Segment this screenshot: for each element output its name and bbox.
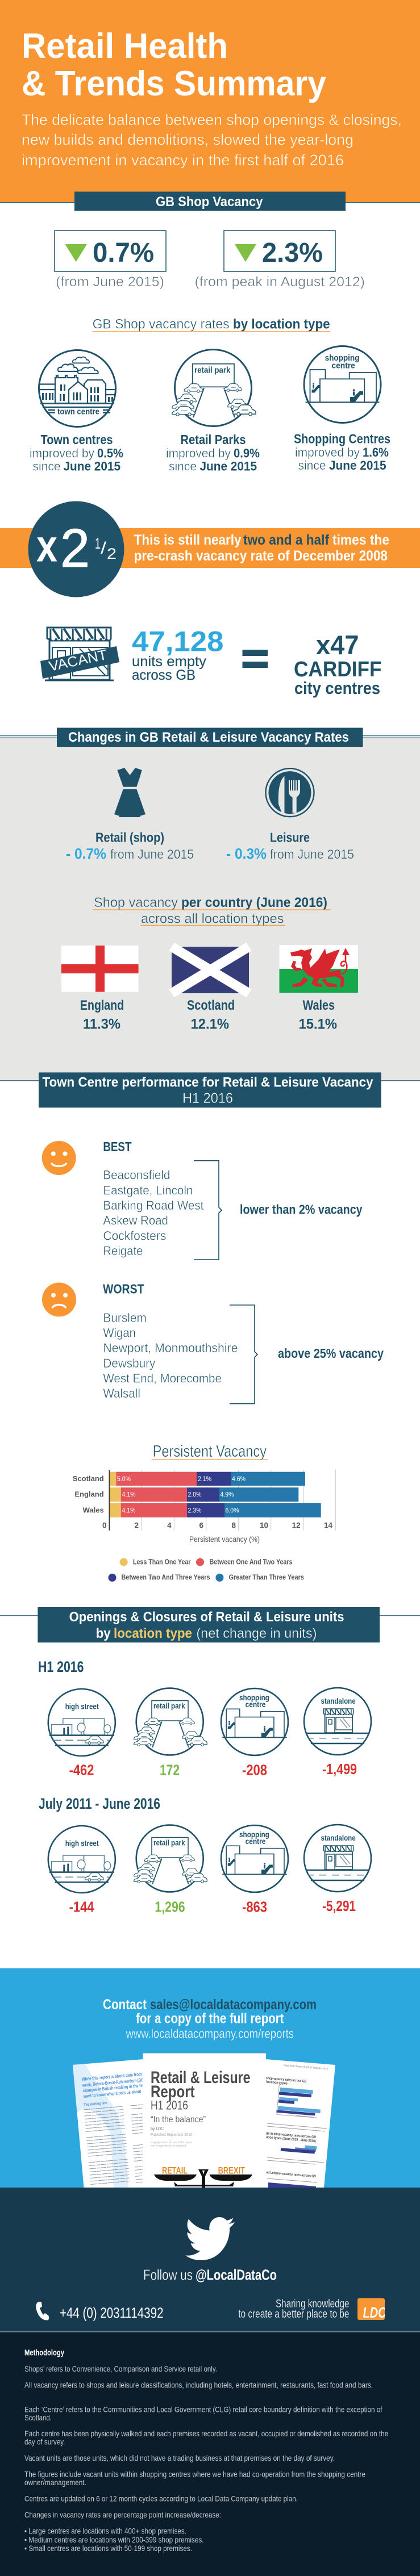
heading: shop vacancy per country — [93, 895, 331, 927]
bar: Scotland: Scotland — [73, 1474, 104, 1483]
axis labels: 14 — [324, 1521, 332, 1530]
label: town centres: June 2015 — [64, 459, 120, 474]
panel: orange header — [0, 0, 420, 202]
stat: 2.3% from peak: (from peak in August 2012) — [194, 274, 365, 290]
bar chart: persistent vacancy: Persistent vacancy (%) — [189, 1534, 260, 1544]
icon: standalone — [304, 1688, 371, 1755]
methodology text: Centres are updated on 6 or 12 month cycles according to Local Data Company update plan. — [24, 2494, 298, 2503]
bar: Wales — [83, 1503, 321, 1517]
list: best centres: Cockfosters — [103, 1229, 166, 1243]
label: town centres: 0.5% — [97, 446, 123, 460]
panel: best town centres — [42, 1139, 363, 1260]
report page: right: location types — [266, 2080, 288, 2086]
report page: cover: Retail & Leisure — [151, 2068, 251, 2087]
heading: persistent vacancy: Persistent Vacancy — [153, 1442, 267, 1461]
icon: high street: high street — [65, 1701, 99, 1711]
list: worst centres: Dewsbury — [103, 1356, 155, 1370]
heading: vacancy rates by location type: by location type — [233, 317, 330, 332]
icon: shopping centre: shopping — [325, 354, 359, 363]
net change figures: 172 — [160, 1762, 180, 1779]
label: England 11.3%: England — [80, 998, 124, 1013]
badge: x2 1/2: x — [36, 520, 57, 571]
axis labels: 0 — [102, 1521, 107, 1530]
follow us: Follow us — [143, 2266, 193, 2283]
methodology text: Vacant units are those units, which did not have a trading business at that premises on the day of survey. — [24, 2453, 335, 2462]
bar: Scotland: 2.1% — [198, 1475, 211, 1483]
bar: Wales: Wales — [83, 1506, 104, 1514]
logo: LDC — [357, 2298, 385, 2320]
list: worst centres — [103, 1311, 238, 1400]
label: Wales 15.1%: 15.1% — [299, 1017, 337, 1032]
bar: England — [74, 1487, 298, 1502]
panel: changes in retail and leisure vacancy rates — [0, 728, 420, 1081]
panel: H1 2016 openings and closures — [38, 1658, 371, 1779]
report page: right: nd Leisure vacancy rates across GB — [266, 2171, 316, 2178]
label: leisure: Leisure — [270, 830, 310, 844]
stat: 47,128 units empty: units empty — [132, 654, 207, 670]
icon: standalone: standalone — [321, 1833, 356, 1842]
report page: cover: Report — [151, 2082, 195, 2101]
panel: best town centres: BEST — [103, 1139, 131, 1154]
bar: Scotland — [73, 1472, 305, 1486]
panel: social footer — [0, 2188, 420, 2332]
label: town centres: Town centres — [41, 432, 113, 447]
report page: right: shop vacancy rates across GB — [266, 2076, 306, 2084]
report page: left — [73, 2059, 144, 2188]
net change figures: -1,499 — [322, 1760, 357, 1778]
callout: two and a half times — [0, 501, 420, 597]
icon: standalone: standalone — [321, 1696, 356, 1705]
contact text: sales@localdatacompany.com — [150, 1997, 317, 2013]
title — [22, 27, 326, 103]
report page: right: ge in shop vacancy rates across GB — [266, 2131, 316, 2139]
report page: cover: by LDC — [151, 2126, 164, 2131]
report page: left: While this report is about data from t — [81, 2071, 144, 2082]
bracket — [194, 1161, 222, 1260]
bar: Scotland: 5.0% — [117, 1475, 131, 1483]
report page: left: week, Before-Brexit-Referendum (BE — [82, 2077, 144, 2088]
report page: left: The starting line — [84, 2101, 107, 2107]
icon: shopping centre — [221, 1688, 288, 1755]
icon: retail park: retail park — [194, 366, 231, 375]
bar: Wales: 6.0% — [225, 1506, 239, 1514]
label: town centres: since — [33, 459, 60, 474]
heading: openings and closures: by — [96, 1626, 111, 1641]
bar: England: 4.9% — [221, 1490, 234, 1498]
stat: 2.3% from peak — [194, 231, 365, 290]
stat: 47,128 units empty — [132, 626, 224, 683]
icon: equals sign — [242, 650, 268, 668]
icon: sad face — [42, 1282, 76, 1316]
heading: vacancy rates by location type — [93, 317, 330, 332]
callout text: times the — [332, 532, 389, 548]
label: retail parks: improved by — [166, 446, 231, 460]
badge: x2 1/2: 2 — [107, 545, 117, 562]
icon: high street: high street — [65, 1838, 99, 1847]
panel: July 2011 - June 2016 openings and closures: July 2011 - June 2016 — [39, 1795, 160, 1812]
list: worst centres: Wigan — [103, 1326, 136, 1340]
heading: openings and closures — [38, 1607, 380, 1642]
badge: x2 1/2: 2 — [60, 518, 90, 579]
legend: Greater Than Three Years — [228, 1573, 304, 1582]
contact text — [103, 1997, 317, 2041]
methodology text: Scotland. — [24, 2413, 52, 2422]
flag: Scotland — [172, 947, 249, 993]
icon: town centre: town centre — [57, 407, 99, 416]
heading: openings and closures: (net change in units) — [196, 1626, 317, 1641]
net change figures — [69, 1760, 357, 1779]
icon: down triangle — [65, 244, 87, 262]
legend: Between Two And Three Years — [122, 1573, 210, 1582]
panel: worst town centres — [42, 1282, 384, 1404]
list: worst centres: Newport, Monmouthshire — [103, 1341, 238, 1355]
stat: 0.7% from June 2015: (from June 2015) — [56, 274, 164, 290]
icon: knife and fork — [266, 768, 314, 817]
icon: high street — [48, 1689, 115, 1756]
bar: Scotland: 4.6% — [232, 1475, 246, 1483]
methodology text: • Large centres are locations with 400+ shop premises. — [24, 2526, 186, 2535]
methodology text: • Small centres are locations with 50-199 shop premises. — [24, 2544, 192, 2553]
heading: shop vacancy per country: per country (June 2016) — [181, 895, 327, 910]
callout text: two and a half — [243, 532, 330, 548]
icon: down triangle — [235, 244, 256, 262]
label: shopping centres: improved by — [295, 445, 360, 459]
heading: town centre performance: Town Centre performance for Retail & Leisure Vacancy — [42, 1075, 373, 1090]
report page: left: want to know what it tells us about — [83, 2089, 142, 2099]
label: shopping centres: Shopping Centres — [294, 432, 390, 446]
heading: GB Shop Vacancy — [74, 192, 346, 211]
legend — [108, 1557, 304, 1582]
label: town centres: improved by — [30, 446, 94, 460]
badge: x2 1/2: / — [101, 539, 107, 558]
list: best centres: Barking Road West — [103, 1198, 203, 1212]
net change figures: 1,296 — [155, 1898, 185, 1916]
label: Scotland 12.1%: 12.1% — [191, 1017, 229, 1032]
list: best centres: Reigate — [103, 1244, 143, 1258]
label: leisure — [226, 830, 354, 862]
axis labels: 12 — [292, 1521, 301, 1530]
axis labels: 2 — [134, 1521, 139, 1530]
contact text: Contact — [103, 1997, 147, 2013]
panel: H1 2016 openings and closures: H1 2016 — [38, 1658, 84, 1675]
panel: worst town centres: WORST — [103, 1282, 144, 1297]
stat: 47,128 units empty: across GB — [132, 667, 196, 683]
report page: left: changes in British retailing in the fir — [82, 2083, 143, 2093]
icon: retail brexit scales — [154, 2165, 252, 2188]
legend: Between One And Two Years — [209, 1557, 292, 1566]
strapline: Sharing knowledge — [276, 2298, 349, 2310]
badge: x2 1/2: 1 — [95, 535, 101, 552]
bar: Wales: 2.3% — [188, 1506, 202, 1514]
label: retail parks: June 2015 — [200, 459, 257, 474]
bracket — [230, 1305, 257, 1404]
heading: shop vacancy per country: Shop vacancy — [94, 895, 178, 910]
net change figures: -208 — [242, 1762, 267, 1779]
list: best centres: Askew Road — [103, 1214, 168, 1228]
axis labels: 6 — [199, 1521, 203, 1530]
title: & Trends Summary — [22, 64, 326, 103]
net change figures: -462 — [69, 1762, 94, 1779]
icon: shopping centre: shopping — [239, 1830, 269, 1839]
icon: retail brexit scales: RETAIL — [162, 2165, 188, 2176]
axis labels: 10 — [260, 1521, 268, 1530]
label: retail — [66, 830, 194, 862]
heading: town centre performance — [39, 1072, 381, 1107]
axis labels: 4 — [167, 1521, 172, 1530]
methodology text: Shops’ refers to Convenience, Comparison and Service retail only. — [24, 2364, 217, 2373]
list: best centres: Eastgate, Lincoln — [103, 1184, 193, 1197]
methodology text — [24, 2364, 388, 2553]
panel: methodology — [0, 2332, 420, 2576]
net change figures: -863 — [242, 1898, 267, 1916]
follow us — [143, 2266, 277, 2283]
label: retail parks: Retail Parks — [181, 432, 246, 447]
panel: shopping centres — [294, 346, 390, 472]
heading: shop vacancy per country: across all location types — [141, 911, 284, 927]
panel: July 2011 - June 2016 openings and closures — [39, 1795, 371, 1916]
report page: right: ation types (June 2015 - June 2016) — [266, 2135, 316, 2143]
list: worst centres: Walsall — [103, 1386, 140, 1400]
label: retail parks — [166, 432, 260, 474]
icon: shopping centre: shopping — [239, 1693, 269, 1702]
icon: town centre — [39, 350, 116, 427]
label: retail: Retail (shop) — [95, 830, 164, 844]
flag: Wales — [280, 945, 358, 993]
heading: GB Shop Vacancy: GB Shop Vacancy — [156, 194, 263, 210]
list: worst centres: Burslem — [103, 1311, 147, 1325]
label: town centres — [30, 432, 123, 474]
icon: shopping centre: centre — [246, 1700, 266, 1709]
strapline: to create a better place to be — [238, 2308, 349, 2320]
stat: x47 Cardiff city centres: x47 — [316, 630, 359, 660]
panel: methodology: Methodology — [24, 2349, 64, 2358]
label: Wales 15.1% — [299, 998, 337, 1032]
label: leisure: from June 2015 — [270, 847, 354, 862]
axis labels — [102, 1521, 332, 1530]
report page: cover — [143, 2054, 266, 2188]
stat: 2.3% from peak: 2.3% — [262, 238, 323, 268]
methodology text: owner/management. — [24, 2478, 86, 2487]
axis labels: 8 — [231, 1521, 236, 1530]
label: retail parks: 0.9% — [234, 446, 260, 460]
report page: cover: Published September 2016 — [151, 2133, 192, 2137]
stat: x47 Cardiff city centres: city centres — [294, 678, 380, 698]
flag: England — [61, 946, 139, 992]
net change figures — [69, 1897, 356, 1916]
icon: standalone — [304, 1825, 371, 1892]
stat: 0.7% from June 2015 — [55, 231, 166, 290]
heading: openings and closures: Openings & Closures of Retail & Leisure units — [69, 1609, 344, 1625]
label: retail: - 0.7% — [66, 845, 106, 862]
label: England 11.3%: 11.3% — [83, 1017, 120, 1032]
panel: social footer: +44 (0) 2031114392 — [60, 2304, 164, 2321]
label: shopping centres: 1.6% — [363, 445, 389, 459]
icon: retail park — [172, 350, 256, 426]
icon: retail park: retail park — [153, 1701, 185, 1710]
stat: x47 Cardiff city centres — [294, 630, 382, 698]
label: leisure: - 0.3% — [226, 845, 267, 862]
subtitle: new builds and demolitions, slowed the year-long — [22, 131, 354, 148]
panel: retail parks — [166, 350, 260, 474]
label: shopping centres — [294, 432, 390, 472]
subtitle: improvement in vacancy in the first half of 2016 — [22, 152, 344, 169]
icon: phone — [36, 2302, 49, 2320]
methodology text: The figures include vacant units within shopping centres where we have had co-operation from the shopping centre — [24, 2470, 365, 2479]
label: England 11.3% — [80, 998, 124, 1032]
strapline — [238, 2298, 349, 2320]
label: retail: from June 2015 — [110, 847, 194, 862]
subtitle — [22, 111, 402, 169]
icon: shopping centre — [304, 346, 381, 423]
icon: shopping centre — [221, 1825, 288, 1892]
icon: shopping centre: centre — [332, 361, 355, 370]
report page: right — [266, 2059, 335, 2188]
report page: cover: Copyright 2016. No part of this report — [151, 2141, 192, 2144]
list: best centres: Beaconsfield — [103, 1168, 170, 1182]
stat: 0.7% from June 2015: 0.7% — [93, 238, 154, 268]
contact text: for a copy of the full report — [136, 2011, 284, 2027]
logo: LDC: LDC — [363, 2304, 386, 2321]
panel: worst town centres: above 25% vacancy — [278, 1346, 384, 1361]
bar: England: 4.1% — [122, 1490, 136, 1498]
icon: vacant shop — [40, 628, 119, 680]
methodology text: day of survey. — [24, 2437, 65, 2447]
icon: retail park — [134, 1688, 207, 1755]
list: best centres — [103, 1168, 203, 1258]
net change figures: -144 — [69, 1898, 94, 1916]
heading: Changes in GB Retail & Leisure Vacancy Rates — [68, 730, 349, 745]
icon: retail park — [134, 1825, 207, 1892]
list: worst centres: West End, Morecombe — [103, 1371, 222, 1385]
bar chart: persistent vacancy — [73, 1470, 335, 1544]
icon: shopping centre: centre — [246, 1837, 266, 1846]
bar: Wales: 4.1% — [122, 1506, 136, 1514]
label: Wales 15.1%: Wales — [302, 998, 335, 1013]
bar: England: 2.0% — [188, 1490, 202, 1498]
panel: contact and report — [0, 1968, 420, 2188]
heading: openings and closures: location type — [114, 1626, 192, 1641]
icon: vacant shop: VACANT — [47, 647, 109, 675]
methodology text: Changes in vacancy rates are percentage point increase/decrease: — [24, 2510, 221, 2519]
report page: cover: “In the balance” — [151, 2115, 206, 2125]
report page: cover: may be reproduced or distributed. — [151, 2144, 186, 2147]
icon: smiley — [42, 1141, 76, 1175]
label: retail parks: since — [169, 459, 197, 474]
heading: town centre performance: H1 2016 — [182, 1090, 233, 1106]
title: Retail Health — [22, 27, 228, 66]
badge: x2 1/2 — [28, 501, 124, 597]
heading: vacancy rates by location type: GB Shop vacancy rates — [93, 317, 230, 332]
legend: Less Than One Year — [133, 1557, 191, 1566]
callout text — [134, 532, 389, 564]
panel: best town centres: lower than 2% vacancy — [240, 1202, 363, 1216]
label: Scotland 12.1%: Scotland — [187, 998, 235, 1013]
label: shopping centres: since — [298, 458, 326, 472]
contact text: www.localdatacompany.com/reports — [126, 2027, 294, 2041]
report page: right: Retail Sector Report H1 2016 | September 2016 — [284, 2064, 328, 2070]
follow us: @LocalDataCo — [196, 2266, 277, 2283]
icon: high street — [48, 1826, 115, 1893]
icon: dress — [114, 768, 145, 817]
stat: x47 Cardiff city centres: CARDIFF — [294, 658, 382, 681]
report page: cover: H1 2016 — [151, 2098, 188, 2113]
icon: retail brexit scales: BREXIT — [218, 2165, 245, 2176]
label: Scotland 12.1% — [187, 998, 235, 1032]
icon: twitter bird — [185, 2217, 235, 2260]
panel: town centres — [30, 350, 123, 474]
label: shopping centres: June 2015 — [329, 458, 386, 472]
subtitle: The delicate balance between shop openings & closings, — [22, 111, 402, 128]
net change figures: -5,291 — [322, 1897, 356, 1914]
bar: England: England — [74, 1490, 104, 1498]
stat: 47,128 units empty: 47,128 — [132, 626, 224, 658]
callout text: pre-crash vacancy rate of December 2008 — [134, 548, 388, 564]
callout text: This is still nearly — [134, 532, 242, 548]
icon: retail park: retail park — [153, 1838, 185, 1847]
methodology text: • Medium centres are locations with 200-399 shop premises. — [24, 2535, 204, 2544]
